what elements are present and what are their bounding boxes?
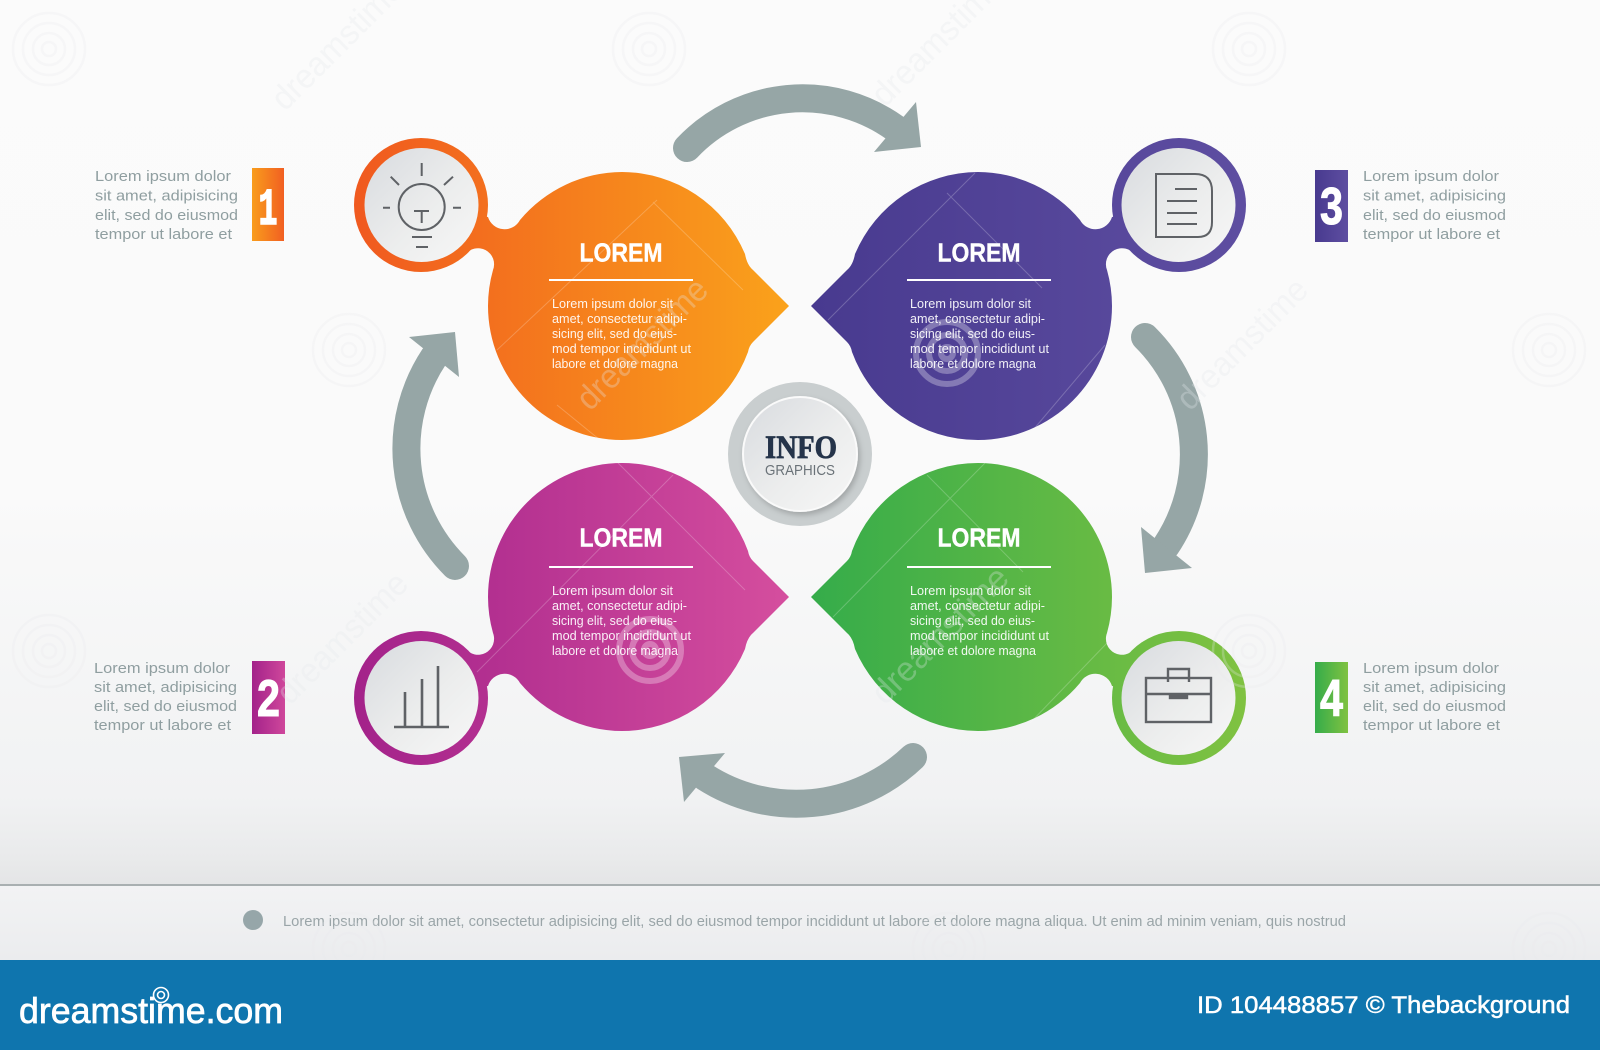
body text: mod tempor incididunt ut: [910, 629, 1050, 643]
watermark overlay: dreamstime: [864, 559, 1017, 712]
body text: mod tempor incididunt ut: [552, 629, 692, 643]
body text: amet, consectetur adipi-: [910, 312, 1045, 326]
footer text: Lorem ipsum dolor sit amet, consectetur adipisicing elit, sed do eiusmod tempor incididunt ut labore et dolore magna aliqua. Ut enim ad minim veniam, quis nostrud: [283, 913, 1346, 930]
body text: amet, consectetur adipi-: [910, 599, 1045, 613]
number badge 1: 1: [258, 181, 278, 240]
arrow: bottom, step 4 to 2: [679, 753, 913, 804]
footer bullet: [243, 910, 263, 930]
side text 4: sit amet, adipisicing: [1363, 679, 1506, 696]
side text 1: tempor ut labore et: [95, 226, 233, 243]
body text: [910, 584, 1050, 658]
footer strip: [0, 884, 1600, 960]
side text 1: elit, sed do eiusmod: [95, 207, 238, 224]
number badge 4: 4: [1320, 670, 1343, 728]
side label: step 1: [95, 168, 284, 243]
body text: labore et dolore magna: [552, 357, 678, 371]
body text: Lorem ipsum dolor sit: [552, 297, 674, 311]
side text 4: tempor ut labore et: [1363, 717, 1501, 734]
panel: purple step 3: [811, 138, 1246, 440]
side text 2: Lorem ipsum dolor: [94, 660, 230, 677]
number badge 3: 3: [1320, 178, 1343, 236]
center badge: info graphics: [728, 382, 872, 526]
body text: labore et dolore magna: [910, 357, 1036, 371]
body text: [910, 297, 1050, 371]
body text: labore et dolore magna: [910, 644, 1036, 658]
heading: LOREM: [938, 238, 1020, 268]
green speech blob with ring: [811, 463, 1246, 765]
body text: mod tempor incididunt ut: [910, 342, 1050, 356]
arrow: left, step 2 to 1: [406, 332, 459, 566]
divider line: [907, 279, 1051, 281]
divider line: [907, 566, 1051, 568]
number badge 2: [252, 661, 285, 734]
orange speech blob with ring: [354, 138, 789, 440]
number badge 3: [1315, 170, 1348, 242]
icon: bar chart: [394, 666, 449, 727]
magenta speech blob with ring: [354, 463, 789, 765]
side text 3: elit, sed do eiusmod: [1363, 207, 1506, 224]
side text 3: sit amet, adipisicing: [1363, 188, 1506, 204]
panel: magenta step 2: [354, 463, 789, 765]
watermark overlay: dreamstime: [569, 271, 716, 418]
body text: amet, consectetur adipi-: [552, 599, 687, 613]
side label: step 2: [94, 660, 285, 734]
side text 1: sit amet, adipisicing: [95, 188, 238, 204]
side text 4: Lorem ipsum dolor: [1363, 660, 1499, 677]
body text: Lorem ipsum dolor sit: [910, 584, 1032, 598]
side text 2: elit, sed do eiusmod: [94, 698, 237, 715]
body text: amet, consectetur adipi-: [552, 312, 687, 326]
body text: Lorem ipsum dolor sit: [910, 297, 1032, 311]
side text 2: [94, 660, 237, 734]
body text: sicing elit, sed do eius-: [552, 614, 677, 628]
arrow: top, step 1 to 3: [687, 98, 921, 152]
side text 4: elit, sed do eiusmod: [1363, 698, 1506, 715]
heading: LOREM: [580, 238, 662, 268]
body text: Lorem ipsum dolor sit: [552, 584, 674, 598]
side text 3: tempor ut labore et: [1363, 226, 1501, 243]
body text: [552, 584, 692, 658]
arrow: right, step 3 to 4: [1141, 337, 1194, 573]
body text: sicing elit, sed do eius-: [910, 327, 1035, 341]
side text 1: Lorem ipsum dolor: [95, 168, 231, 185]
number badge 1: [252, 168, 284, 241]
icon: document: [1156, 174, 1212, 237]
body text: sicing elit, sed do eius-: [552, 327, 677, 341]
side label: step 4: [1315, 660, 1506, 734]
divider line: [549, 566, 693, 568]
body text: labore et dolore magna: [552, 644, 678, 658]
center subtitle: GRAPHICS: [765, 462, 835, 479]
purple speech blob with ring: [811, 138, 1246, 440]
divider line: [549, 279, 693, 281]
side text 1: [95, 168, 238, 243]
icon: light bulb: [383, 163, 461, 247]
image id credit: ID 104488857 © Thebackground: [1197, 992, 1570, 1019]
footer note: [243, 910, 1346, 930]
body text: sicing elit, sed do eius-: [910, 614, 1035, 628]
number badge 2: 2: [257, 670, 280, 728]
side text 4: [1363, 660, 1506, 734]
side text 2: tempor ut labore et: [94, 717, 232, 734]
panel: green step 4: [811, 463, 1246, 765]
center title: INFO: [765, 430, 837, 466]
side label: step 3: [1315, 168, 1506, 243]
side text 3: Lorem ipsum dolor: [1363, 168, 1499, 185]
credit banner: [0, 960, 1600, 1050]
watermark overlay: dreamstime: [1169, 271, 1316, 418]
logo wordmark: dreamstime.com: [19, 990, 283, 1031]
body text: [552, 297, 692, 371]
heading: LOREM: [580, 522, 662, 552]
watermark overlay: dreamstime: [269, 565, 416, 712]
icon: briefcase: [1146, 669, 1211, 722]
number badge 4: [1315, 662, 1348, 733]
heading: LOREM: [938, 522, 1020, 552]
body text: mod tempor incididunt ut: [552, 342, 692, 356]
panel: orange step 1: [354, 138, 789, 440]
side text 2: sit amet, adipisicing: [94, 679, 237, 696]
icon: logo spiral: [154, 988, 168, 1002]
side text 3: [1363, 168, 1506, 243]
